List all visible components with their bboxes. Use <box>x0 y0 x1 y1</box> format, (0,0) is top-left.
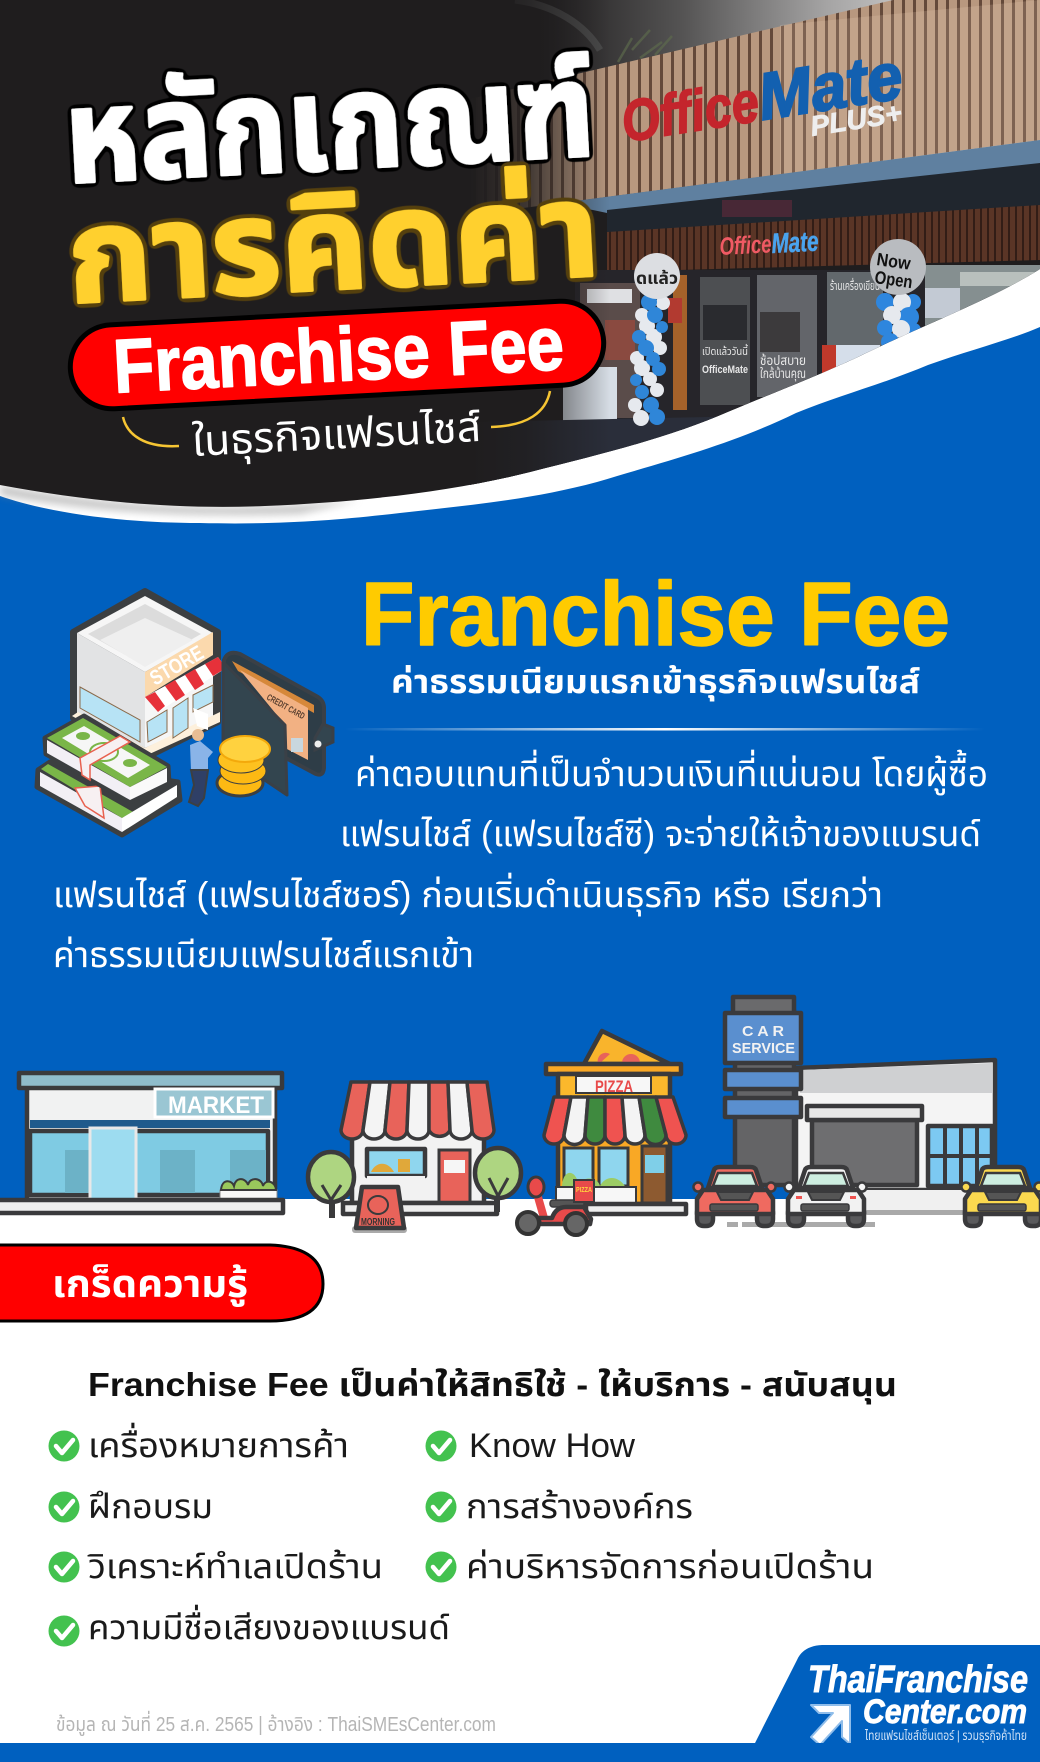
person body <box>190 741 213 770</box>
cafe bread <box>371 1159 410 1172</box>
car wheels <box>965 1206 1040 1226</box>
photo: wooden facade <box>470 0 1040 215</box>
stripe 6 <box>639 1097 666 1144</box>
photo: window lettering <box>702 277 880 381</box>
photo: canopy reflection <box>722 200 792 217</box>
photo: poster <box>925 288 960 318</box>
item 2: Know How <box>469 1427 635 1465</box>
car windscreen <box>981 1173 1025 1186</box>
market roof <box>19 1073 282 1088</box>
pill text: Franchise Fee <box>111 301 566 410</box>
money band <box>80 736 130 780</box>
bill spot 2 <box>123 759 137 767</box>
car body <box>788 1190 864 1214</box>
car bumper <box>801 1204 849 1211</box>
car cab <box>799 1167 853 1188</box>
scooter head <box>528 1177 544 1197</box>
photo: sky <box>572 0 1040 210</box>
tab label: เกร็ดความรู้ <box>52 1264 248 1307</box>
photo: shelves 1 <box>703 305 747 340</box>
garage door <box>812 1120 917 1185</box>
white balloons <box>628 296 670 426</box>
stripe 1 <box>341 1082 370 1139</box>
market body <box>27 1085 275 1200</box>
lower outline <box>37 762 180 835</box>
paragraph line 1: ค่าตอบแทนที่เป็นจำนวนเงินที่แน่นอน โดยผู้ซื้อ <box>355 749 988 795</box>
illustration: store, money, wallet <box>37 591 333 835</box>
source note: ข้อมูล ณ วันที่ 25 ส.ค. 2565 | อ้างอิง : ThaiSMEsCenter.com <box>56 1710 496 1737</box>
pizza windows <box>564 1148 628 1186</box>
stripe 2 <box>363 1082 390 1139</box>
store roof floor <box>100 618 193 667</box>
car mirrors <box>784 1182 866 1192</box>
checklist <box>48 1422 874 1647</box>
stripe 5 <box>622 1097 645 1144</box>
street illustration <box>0 997 1040 1235</box>
tree branches <box>322 1185 341 1200</box>
photo: foliage <box>618 30 672 62</box>
stripe 6 <box>448 1082 472 1139</box>
right top balloon <box>870 239 926 295</box>
left tree <box>308 1152 354 1218</box>
person legs <box>189 770 208 806</box>
top bill <box>47 718 167 787</box>
awning base <box>145 657 226 712</box>
question sign <box>193 708 208 730</box>
pizza door glass <box>645 1155 664 1173</box>
scooter seat <box>550 1200 584 1207</box>
photo: red tag <box>822 345 836 375</box>
sign text 1: C A R <box>742 1023 784 1040</box>
scooter front wheel <box>565 1213 587 1235</box>
car mirrors <box>962 1182 1040 1192</box>
title line 1: หลักเกณฑ์ <box>61 36 598 211</box>
tree trunk <box>329 1180 335 1218</box>
stripe 3 <box>585 1097 605 1144</box>
garage door head <box>807 1106 922 1120</box>
item 5: วิเคราะห์ทำเลเปิดร้าน <box>87 1548 383 1586</box>
person <box>189 729 213 806</box>
stripe 4 <box>407 1082 429 1139</box>
red pill Franchise Fee <box>68 299 606 412</box>
photo: facade light <box>780 0 1040 175</box>
item 6: ค่าบริหารจัดการก่อนเปิดร้าน <box>466 1548 874 1586</box>
Now Open label: Open <box>873 267 914 292</box>
store right wall <box>145 660 213 748</box>
wallet <box>223 653 333 795</box>
photo: brown sign band <box>607 205 1040 272</box>
right tree <box>475 1148 521 1212</box>
photo: ceiling light strip <box>960 272 1040 286</box>
scooter body <box>538 1207 591 1224</box>
wallet lining <box>232 661 314 713</box>
photo: left kiosk area <box>580 283 640 418</box>
market kerb <box>0 1200 283 1213</box>
left top balloon <box>634 253 680 299</box>
card chip <box>291 738 303 752</box>
pizza upper <box>558 1074 670 1098</box>
small word Mate: Mate <box>771 226 819 259</box>
top bill inner <box>62 726 150 778</box>
tower <box>735 1010 794 1185</box>
wallet card <box>240 670 308 760</box>
lettering 4: ใกล้บ้านคุณ <box>760 366 806 381</box>
pizza sign <box>576 1076 651 1093</box>
market shop <box>0 1073 283 1213</box>
photo: right balloon column <box>870 239 926 351</box>
pizza door <box>642 1146 667 1203</box>
store roof rim <box>77 596 213 672</box>
car grille <box>985 1192 1021 1200</box>
subtitle in header: ในธุรกิจแฟรนไชส์ <box>191 403 482 467</box>
awning stripes <box>145 657 226 712</box>
photo: kiosk sign <box>587 289 632 303</box>
scooter rear wheel <box>517 1212 539 1234</box>
pizza awning <box>544 1097 686 1144</box>
store left window <box>80 687 140 742</box>
description paragraph <box>53 749 988 975</box>
market sign text: MARKET <box>168 1092 264 1119</box>
lower top <box>41 764 133 818</box>
upper outline <box>45 716 169 802</box>
Now Open label: Now <box>875 249 913 274</box>
store door <box>173 698 188 738</box>
car body <box>697 1190 773 1214</box>
cafe sill <box>367 1176 425 1194</box>
yellow bracket left <box>123 417 179 446</box>
cafe kerb <box>343 1203 497 1214</box>
divider <box>345 728 985 730</box>
sign word Office: Office <box>617 69 763 155</box>
cafe door <box>439 1150 470 1203</box>
pizza planter <box>556 1187 636 1204</box>
yellow bracket right <box>491 391 550 427</box>
photo: canopy underside <box>607 163 1040 235</box>
title line 2: การคิดค่า <box>64 156 603 331</box>
red car <box>694 1167 776 1226</box>
photo: big OfficeMate sign <box>624 60 902 141</box>
blue balloons <box>630 294 668 425</box>
forecourt stripe <box>865 1210 967 1215</box>
pizza bushes <box>562 1173 626 1188</box>
list heading: Franchise Fee เป็นค่าให้สิทธิใช้ - ให้บริการ - สนับสนุน <box>88 1366 897 1405</box>
car cab <box>976 1167 1030 1188</box>
store left wall <box>77 633 145 748</box>
car wheels <box>788 1206 864 1226</box>
sign text 2: SERVICE <box>732 1040 795 1057</box>
dark background <box>0 0 1040 530</box>
photo: orange pillar <box>673 275 687 410</box>
window bars <box>928 1126 992 1186</box>
logo background <box>754 1645 1040 1745</box>
upper side right <box>130 768 167 800</box>
wallet stud <box>314 740 322 748</box>
parking shadows <box>727 1222 875 1227</box>
photo: window pane 4 <box>925 265 1040 326</box>
paragraph line 4: ค่าธรรมเนียมแฟรนไชส์แรกเข้า <box>53 934 474 975</box>
market planter <box>220 1190 277 1201</box>
pizza shop <box>544 1031 686 1214</box>
board shadow <box>352 1226 407 1233</box>
board <box>356 1187 404 1228</box>
cafe window <box>367 1149 425 1176</box>
photo: shelves 2 <box>760 312 800 352</box>
market window <box>30 1131 268 1195</box>
garage windows <box>928 1126 992 1186</box>
car wheels <box>697 1206 773 1226</box>
scooter <box>517 1177 594 1235</box>
stripe 7 <box>656 1097 686 1144</box>
bill ring <box>90 743 118 761</box>
morning board <box>352 1187 407 1233</box>
store fascia <box>145 632 213 697</box>
tower cap <box>733 997 794 1014</box>
bill spot 1 <box>76 732 90 740</box>
car service building <box>725 997 1040 1212</box>
red tab: knowledge <box>0 1245 323 1321</box>
stripe 3 <box>385 1082 409 1139</box>
photo: small OfficeMate sign <box>720 232 818 255</box>
car tail lights <box>796 1196 856 1199</box>
tree branches <box>489 1178 508 1196</box>
car cab <box>708 1167 762 1188</box>
lettering 1: เปิดแล้ววันนี้ <box>702 343 748 358</box>
item 4: การสร้างองค์กร <box>466 1488 693 1526</box>
tower sign <box>725 1013 801 1063</box>
photo: window pane 1 <box>700 277 750 405</box>
store window right <box>193 685 213 712</box>
car bumper <box>978 1204 1026 1211</box>
paragraph line 2: แฟรนไชส์ (แฟรนไชส์ซี) จะจ่ายให้เจ้าของแบรนด์ <box>340 813 981 854</box>
cafe body <box>352 1130 484 1203</box>
header shadow <box>0 485 360 515</box>
sign word Mate: Mate <box>753 38 907 134</box>
yellow car <box>962 1167 1040 1226</box>
photo: promo stand <box>822 345 880 373</box>
lower right <box>122 785 177 832</box>
wallet flap <box>223 662 287 795</box>
tree crown <box>308 1152 354 1202</box>
photo: red poster <box>668 298 682 323</box>
board text: MORNING <box>361 1217 395 1228</box>
car windscreen <box>804 1173 848 1186</box>
white ground <box>0 1199 1040 1744</box>
market interior <box>65 1150 266 1193</box>
stripe 5 <box>429 1082 450 1136</box>
stripe 1 <box>544 1097 571 1144</box>
photo: kiosk counter <box>563 367 617 422</box>
store sign text: STORE <box>146 641 208 690</box>
logo arrow <box>811 1705 850 1745</box>
pill shape <box>68 299 606 411</box>
pizza box label: PIZZA <box>576 1187 592 1194</box>
pizza roof slice <box>584 1031 670 1064</box>
upper side <box>47 740 130 800</box>
lower front <box>40 772 122 832</box>
pizza body <box>558 1130 670 1204</box>
photo: left balloon column <box>628 253 680 426</box>
tree trunk <box>494 1180 500 1212</box>
Now Open label <box>873 249 914 292</box>
photo: roof beam <box>515 0 600 50</box>
wallet clasp <box>315 724 333 750</box>
cafe door sign <box>444 1160 465 1173</box>
tower band 2 <box>725 1098 801 1117</box>
market plants <box>221 1179 276 1190</box>
store base <box>72 712 220 756</box>
forecourt <box>860 1190 1040 1212</box>
tower band 1 <box>725 1070 801 1089</box>
lettering 5: ร้านเครื่องเขียน <box>830 277 880 293</box>
item 7: ความมีชื่อเสียงของแบรนด์ <box>88 1604 450 1647</box>
pizza kerb <box>586 1204 686 1214</box>
store roof inner wall <box>88 604 201 666</box>
card label: CREDIT CARD <box>265 692 307 721</box>
right balloons <box>876 293 894 311</box>
header panel with store photo <box>0 0 1040 530</box>
photo: kiosk red goods <box>605 320 635 360</box>
lettering 2: OfficeMate <box>702 364 748 376</box>
stripe 4 <box>605 1097 625 1144</box>
wallet back <box>224 653 324 790</box>
stripe 2 <box>564 1097 588 1144</box>
paragraph line 3: แฟรนไชส์ (แฟรนไชส์ซอร์) ก่อนเริ่มดำเนินธุรกิจ หรือ เรียกว่า <box>53 872 883 916</box>
lettering 3: ช้อปสบาย <box>760 353 806 368</box>
item 3: ฝึกอบรม <box>88 1488 213 1526</box>
pepperoni <box>598 1053 640 1063</box>
small word Office: Office <box>719 230 772 261</box>
footer logo <box>754 1645 1040 1745</box>
coin 4 <box>220 736 270 762</box>
person head <box>192 729 204 741</box>
market band <box>30 1120 270 1128</box>
coin 2 <box>220 758 266 784</box>
photo: pavement <box>470 410 1040 520</box>
photo: shop front <box>575 270 1040 430</box>
heading Franchise Fee: Franchise Fee <box>361 565 950 665</box>
striped awning <box>145 657 226 712</box>
garage building <box>796 1060 995 1190</box>
photo: left fade to dark <box>470 0 610 530</box>
gold coins <box>217 736 270 796</box>
store outline <box>73 591 218 758</box>
sign word Plus: PLUS+ <box>808 97 904 142</box>
cafe awning <box>341 1082 494 1139</box>
pizza sign text: PIZZA <box>595 1077 633 1096</box>
photo: canopy <box>560 140 1040 213</box>
car windscreen <box>713 1173 757 1186</box>
board cup <box>368 1196 388 1214</box>
upper money stack <box>45 716 169 802</box>
car mirrors <box>694 1182 776 1192</box>
white car <box>784 1167 866 1226</box>
car grille <box>808 1192 844 1200</box>
store window left <box>147 710 167 742</box>
photo: window pane 2 <box>757 275 817 397</box>
market sign <box>155 1089 273 1117</box>
white swoosh under header <box>0 250 1040 523</box>
stripe 7 <box>467 1082 494 1139</box>
tab shape <box>0 1245 323 1321</box>
left balloon label: ดแล้ว <box>636 269 678 288</box>
scooter stem <box>536 1190 544 1218</box>
car body <box>965 1190 1040 1214</box>
tree crown <box>475 1148 521 1198</box>
lower band <box>75 786 104 818</box>
pizza ledge <box>546 1064 681 1074</box>
coin 1 <box>217 770 263 796</box>
car bumper <box>710 1204 758 1211</box>
photo: window pane 3 <box>827 272 883 370</box>
subheading: ค่าธรรมเนียมแรกเข้าธุรกิจแฟรนไชส์ <box>391 663 920 702</box>
pizza box <box>574 1180 594 1202</box>
cafe shop <box>308 1082 521 1233</box>
market door <box>90 1128 136 1200</box>
footer blue strip <box>0 1743 1040 1762</box>
car grille <box>717 1192 753 1200</box>
coin 3 <box>218 747 264 773</box>
garage upper wall <box>800 1063 992 1093</box>
lower money stack <box>37 762 180 835</box>
item 1: เครื่องหมายการค้า <box>88 1422 349 1465</box>
